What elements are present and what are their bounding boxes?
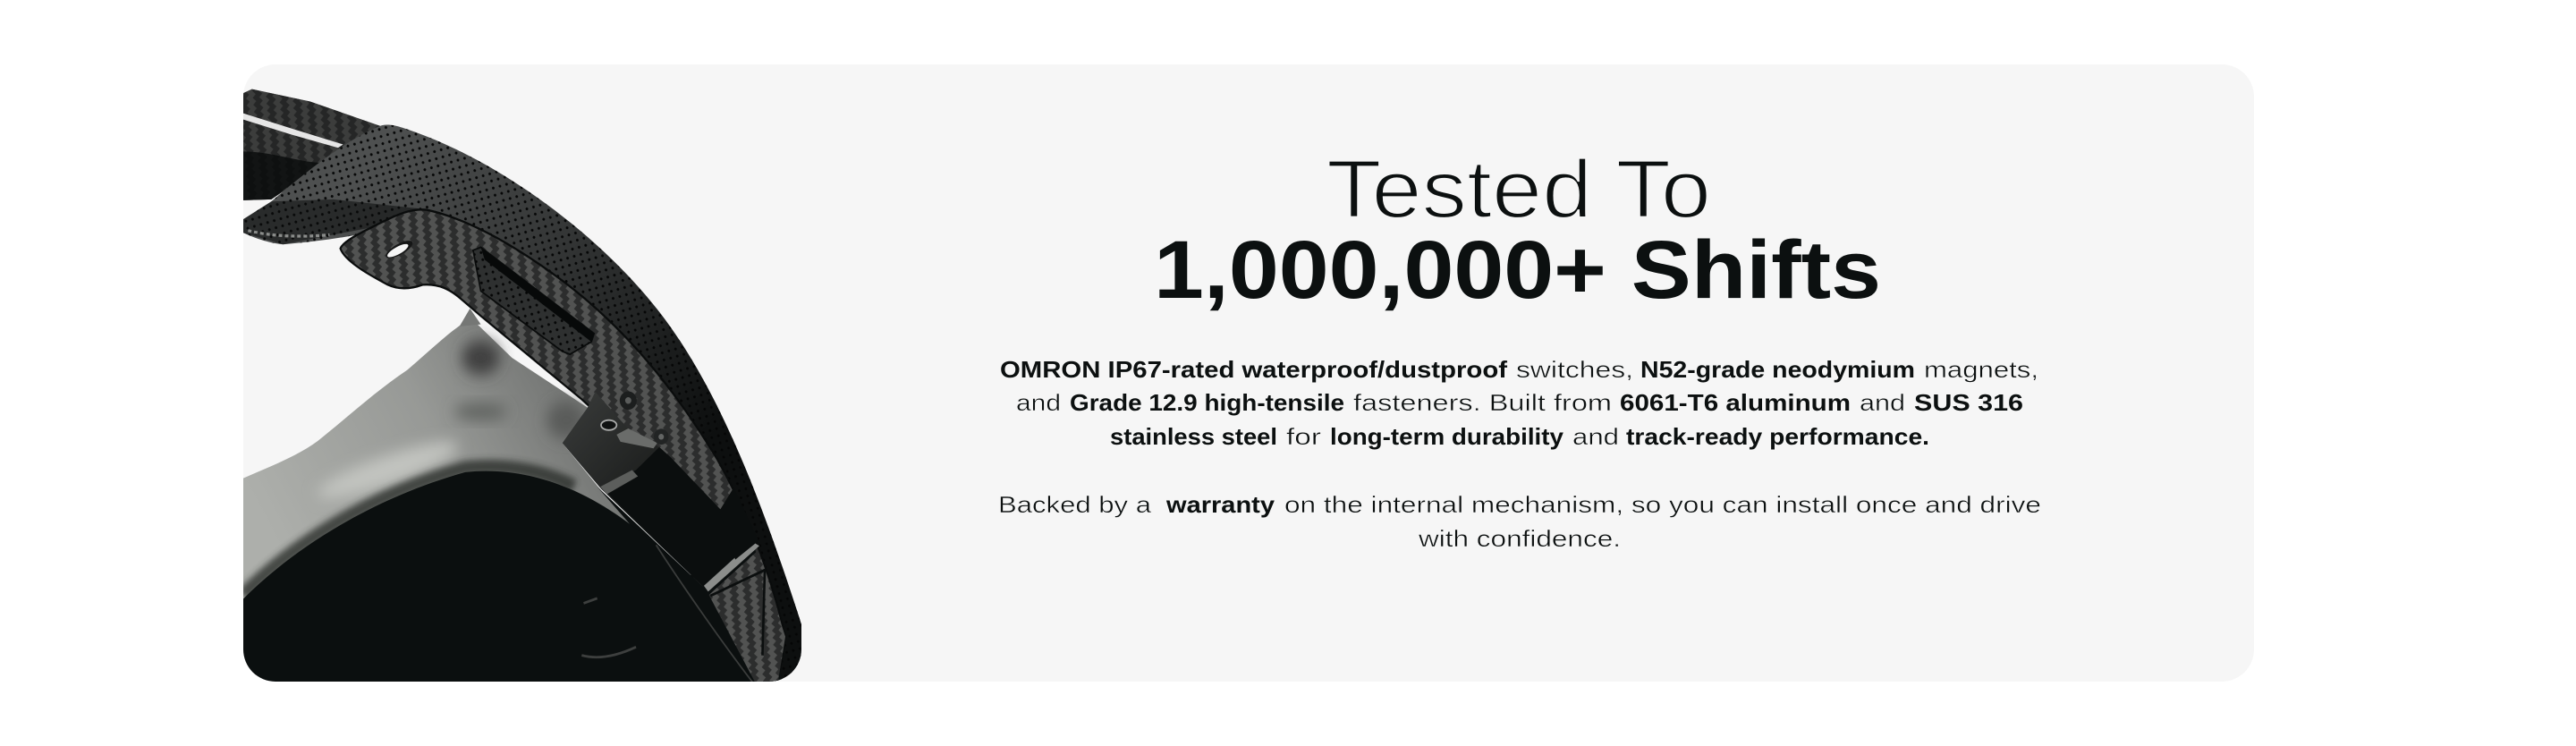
panel: grey card	[243, 64, 2254, 682]
text block: materials paragraph: long-term durability	[1330, 423, 1564, 450]
photo: carbon fibre steering wheel with shift paddle	[243, 89, 802, 684]
text block: materials paragraph: N52-grade neodymium	[1640, 356, 1915, 383]
text block: warranty paragraph: with confidence.	[1418, 525, 1621, 552]
text block: materials paragraph: and	[1016, 389, 1061, 416]
text block: materials paragraph: track-ready performance.	[1626, 423, 1929, 450]
steering column shroud	[243, 309, 630, 599]
text block: warranty paragraph: Backed by a	[998, 491, 1152, 518]
text block: materials paragraph: fasteners. Built from	[1353, 389, 1612, 416]
text block: materials paragraph: switches,	[1516, 356, 1633, 383]
text block: materials paragraph: OMRON IP67-rated waterproof/dustproof	[1000, 356, 1507, 383]
text block: materials paragraph: and	[1572, 423, 1619, 450]
text block: materials paragraph: 6061-T6 aluminum	[1620, 389, 1851, 416]
leather wheel grip	[243, 125, 802, 684]
wheel rim: carbon top section	[243, 89, 382, 200]
text block: warranty paragraph	[998, 491, 2041, 552]
title line 1: Tested To	[1326, 144, 1711, 235]
text block: warranty paragraph: warranty	[1165, 491, 1275, 518]
text block: materials paragraph	[1000, 356, 2038, 450]
black mount block and bolts	[563, 392, 785, 684]
text block: materials paragraph: for	[1286, 423, 1321, 450]
text block: materials paragraph: stainless steel	[1110, 423, 1277, 450]
text block: materials paragraph: Grade 12.9 high-tensile	[1070, 389, 1344, 416]
title	[1154, 144, 1881, 316]
carbon fibre shift paddle	[341, 209, 785, 684]
text block: materials paragraph: and	[1860, 389, 1905, 416]
title line 2: 1,000,000+ Shifts	[1154, 225, 1881, 316]
text block: materials paragraph: magnets,	[1924, 356, 2038, 383]
black steering wheel hub	[243, 467, 754, 684]
text block: materials paragraph: SUS 316	[1914, 389, 2023, 416]
text block: warranty paragraph: on the internal mechanism, so you can install once and drive	[1284, 491, 2041, 518]
